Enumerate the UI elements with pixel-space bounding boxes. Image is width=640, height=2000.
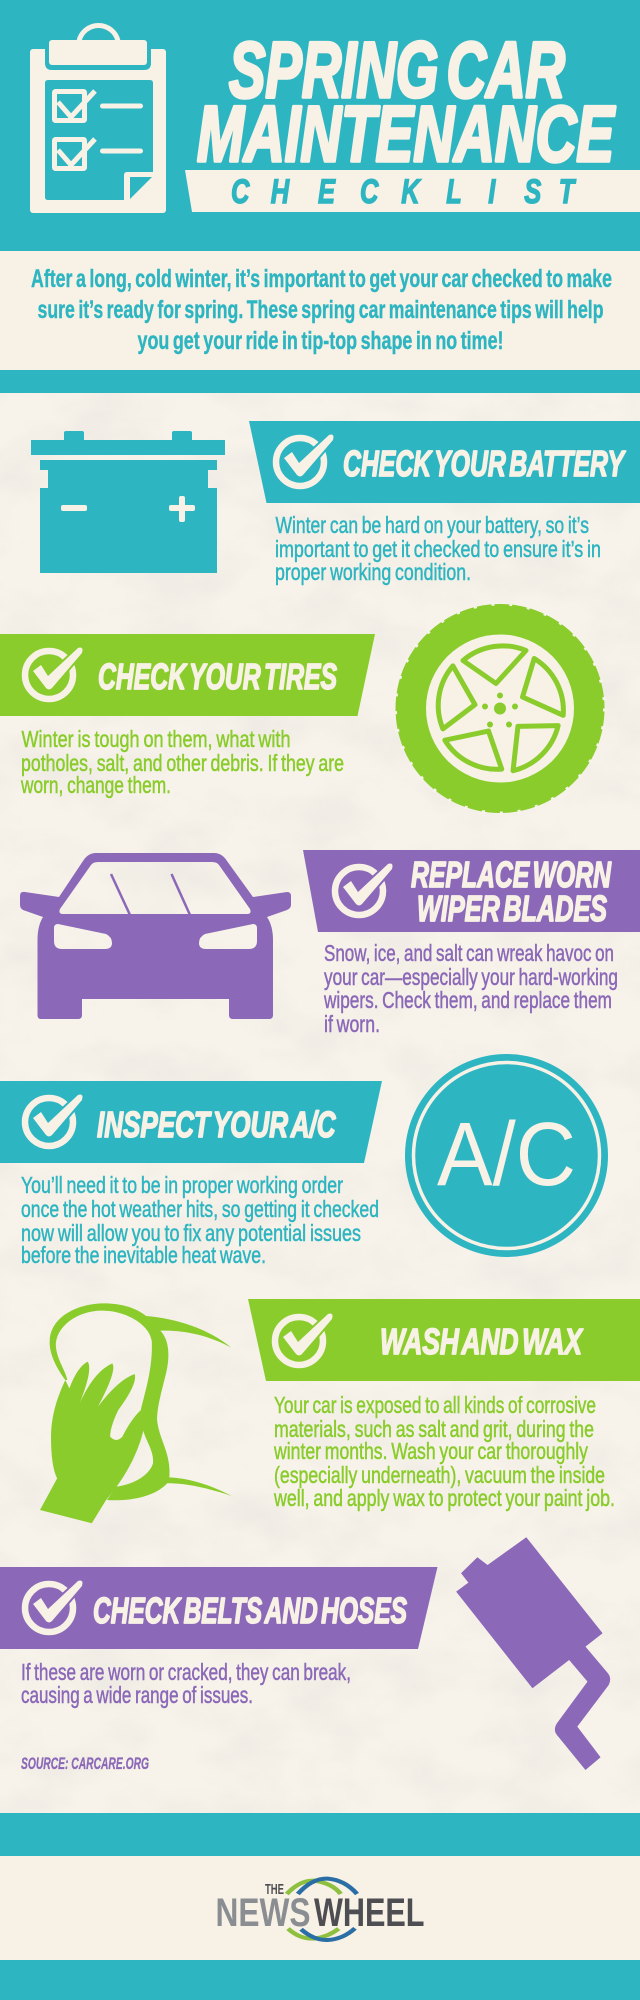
logo: the news wheel xyxy=(216,1879,424,1940)
panel: check your battery xyxy=(31,421,640,585)
body text xyxy=(275,512,601,585)
body text xyxy=(21,1659,351,1708)
icon: check mark xyxy=(25,648,82,699)
logo: the news wheel: THE xyxy=(265,1881,284,1898)
icon: car front xyxy=(20,853,291,1019)
icon: check mark xyxy=(25,1581,82,1632)
body text: before the inevitable heat wave. xyxy=(21,1242,266,1268)
icon: check mark xyxy=(275,1314,332,1365)
panel: check your tires xyxy=(0,604,605,814)
panel: replace worn wiper blades xyxy=(20,850,640,1037)
panel: wash and wax xyxy=(40,1299,640,1523)
heading banner xyxy=(0,1567,438,1649)
icon: exhaust pipe xyxy=(456,1537,610,1770)
body text: If these are worn or cracked, they can break, xyxy=(21,1659,351,1685)
panel: footer logo xyxy=(0,1856,640,1960)
panel: introduction xyxy=(0,251,640,370)
icon: a/c badge: A/C xyxy=(437,1105,576,1205)
body text: now will allow you to fix any potential issues xyxy=(21,1220,361,1246)
divider band xyxy=(0,370,640,393)
body text: causing a wide range of issues. xyxy=(21,1682,253,1708)
heading banner xyxy=(248,1299,640,1381)
icon: hand with sponge xyxy=(40,1303,232,1523)
heading banner xyxy=(303,850,640,932)
icon: car battery xyxy=(31,431,225,573)
heading: CHECK BELTS AND HOSES xyxy=(93,1590,407,1631)
logo: the news wheel: NEWS xyxy=(216,1891,310,1935)
icon: a/c badge xyxy=(405,1054,608,1257)
heading: CHECK YOUR TIRES xyxy=(98,656,337,697)
icon: check mark xyxy=(276,435,334,486)
icon: check mark xyxy=(335,864,392,915)
body text: Winter is tough on them, what with xyxy=(22,726,290,752)
panel: introduction: you get your ride in tip-top shape in no time! xyxy=(138,327,504,355)
subtitle banner: checklist xyxy=(185,170,640,212)
source note: SOURCE: CARCARE.ORG xyxy=(21,1755,149,1773)
footer band: teal xyxy=(0,1813,640,1856)
heading xyxy=(411,854,612,929)
title xyxy=(197,25,616,178)
body text: proper working condition. xyxy=(275,559,471,585)
subtitle banner: checklist: CHECKLIST xyxy=(231,174,577,211)
body text xyxy=(21,1172,379,1268)
body text xyxy=(273,1392,615,1511)
heading banner xyxy=(249,421,640,503)
panel: paper background xyxy=(0,393,640,1813)
logo: the news wheel: WHEEL xyxy=(314,1891,424,1935)
panel: header xyxy=(0,0,640,251)
body text: worn, change them. xyxy=(20,772,171,798)
body text: You’ll need it to be in proper working order xyxy=(21,1172,343,1198)
body text: once the hot weather hits, so getting it checked xyxy=(21,1196,379,1222)
icon: check mark xyxy=(25,1095,82,1146)
heading banner xyxy=(0,634,375,716)
panel: inspect your a/c xyxy=(0,1054,608,1268)
footer band: bottom teal xyxy=(0,1960,640,2000)
body text xyxy=(20,726,344,798)
body text: if worn. xyxy=(324,1011,380,1037)
panel: check belts and hoses xyxy=(0,1537,610,1773)
icon: tire and wheel xyxy=(395,604,605,814)
body text: potholes, salt, and other debris. If they are xyxy=(21,750,344,776)
heading: INSPECT YOUR A/C xyxy=(97,1104,336,1145)
heading banner xyxy=(0,1081,382,1163)
icon: clipboard checklist xyxy=(30,25,166,213)
body text xyxy=(323,940,618,1037)
